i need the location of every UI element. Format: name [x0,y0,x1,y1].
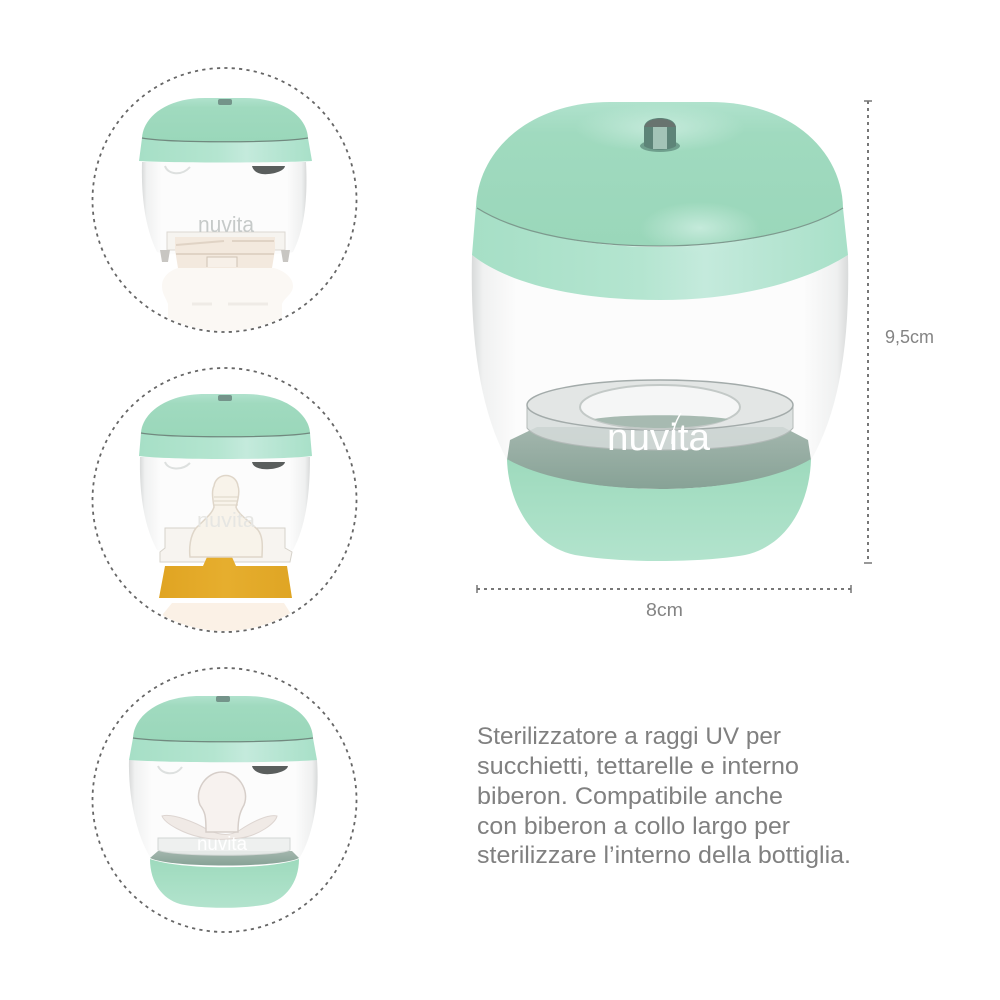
UV lamp [252,766,288,774]
orange screw ring [159,557,292,598]
bottom base [507,459,811,561]
label: 8cm: 8cm [646,600,683,620]
clear body [472,255,848,490]
ghost clip [165,166,190,173]
teat [190,476,262,557]
dashed circle [92,68,356,332]
logo: nuvita [197,834,247,855]
panel: teat use [92,368,356,635]
dimension: width [477,585,851,620]
clear chamber [140,457,310,553]
panel: main sterilizer product [472,102,848,561]
side clips [160,250,290,262]
logo: nuvita: nuvita [607,417,711,459]
dashed circle [92,368,356,632]
description text: biberon. Compatibile anche [477,783,783,810]
seam [133,738,313,742]
clear chamber [142,162,306,255]
clear chamber [129,760,318,866]
panel: pacifier use [92,668,356,932]
bottom base [150,859,299,908]
dashed circle [92,668,356,932]
infographic canvas [92,67,933,933]
button [216,696,230,702]
button [218,395,232,401]
lid band [139,138,312,162]
power button [640,118,680,152]
lid seam [477,208,843,246]
panel: bottle neck use [92,68,356,335]
button [218,99,232,105]
threaded neck [175,237,275,268]
description text: Sterilizzatore a raggi UV per [477,723,781,750]
flared bottle [163,603,290,631]
lid dome [476,102,843,246]
lid dome [142,98,308,142]
lid band [472,206,848,300]
lid dome [141,394,310,437]
description text [477,723,851,869]
logo: nuvita [197,510,256,532]
seam [142,138,308,142]
description text: con biberon a collo largo per [477,813,790,840]
UV lamp [252,166,285,174]
base plate [150,851,299,866]
transparent collar [167,232,285,250]
logo: nuvita [198,212,255,237]
ring and tray [160,528,292,562]
lid band [139,433,312,459]
dome dimple highlight [575,104,745,152]
dimension: height [864,101,934,563]
lid dome [133,696,313,742]
ghost clip [165,462,190,469]
transparent ring [158,838,290,855]
ghost clip [158,766,182,773]
description text: succhietti, tettarelle e interno [477,753,799,780]
seam [141,433,310,437]
UV lamp [252,462,285,469]
dome lower highlight [640,202,760,254]
description text: sterilizzare l’interno della bottiglia. [477,842,851,869]
base plate [507,427,811,489]
label: 9,5cm: 9,5cm [885,327,934,347]
transparent ring insert [527,380,793,450]
lid band [129,738,317,762]
pacifier [162,772,277,839]
bottle [162,268,293,335]
